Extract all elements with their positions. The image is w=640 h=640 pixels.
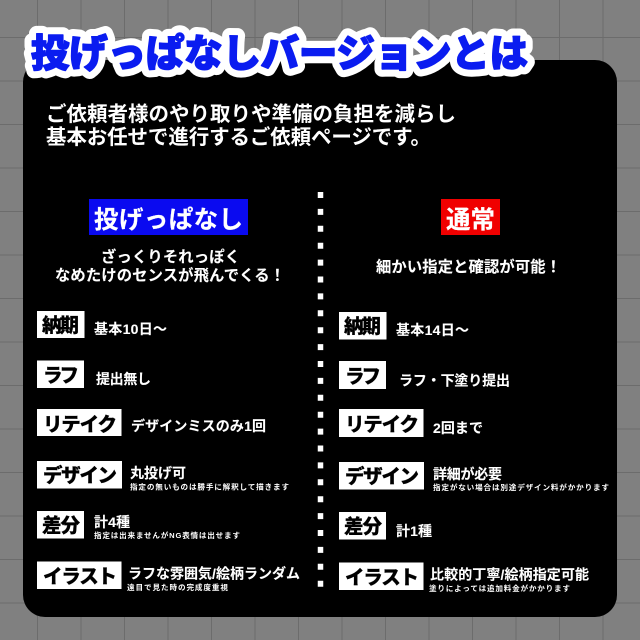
row: イラスト: イラスト xyxy=(345,567,419,589)
row: 差分: 差分 xyxy=(344,515,382,538)
row: イラスト: イラスト xyxy=(43,566,117,588)
row: ラフ: ラフ xyxy=(345,366,381,388)
row: 差分: 計1種 xyxy=(396,523,432,539)
heading: 通常: 通常 xyxy=(446,206,495,234)
row: ラフ xyxy=(37,360,151,388)
panel: left column, 投げっぱなし xyxy=(37,199,300,592)
intro text: 基本お任せで進行するご依頼ページです。 xyxy=(46,125,431,149)
row: 納期 xyxy=(37,311,167,338)
row: デザイン xyxy=(339,462,609,492)
heading: 通常 xyxy=(441,199,500,235)
row: デザイン: デザイン xyxy=(345,465,419,488)
row: イラスト xyxy=(37,562,300,592)
row: ラフ: ラフ・下塗り提出 xyxy=(399,372,510,388)
description: left column: なめたけのセンスが飛んでくる！ xyxy=(55,266,285,284)
row: イラスト: 遠目で見た時の完成度重視 xyxy=(127,582,228,592)
row: リテイク xyxy=(339,409,483,437)
panel: right column, 通常 xyxy=(339,199,609,593)
description: right column: 細かい指定と確認が可能！ xyxy=(376,258,561,276)
row: ラフ: 提出無し xyxy=(96,371,151,387)
row: 納期: 納期 xyxy=(344,315,381,338)
row: リテイク: リテイク xyxy=(43,414,117,436)
row: リテイク: リテイク xyxy=(345,414,419,436)
row: 納期: 基本14日〜 xyxy=(396,322,469,338)
row: デザイン: 詳細が必要 xyxy=(433,466,502,482)
intro text: ご依頼者様のやり取りや準備の負担を減らし xyxy=(46,102,456,126)
row: 納期: 基本10日〜 xyxy=(94,321,167,337)
row: 差分: 差分 xyxy=(42,514,80,537)
row: 差分: 計4種 xyxy=(94,514,130,530)
heading: 投げっぱなし: 投げっぱなし xyxy=(94,206,243,234)
row: イラスト: ラフな雰囲気/絵柄ランダム xyxy=(128,566,300,582)
row: 納期 xyxy=(339,312,469,340)
row: ラフ: ラフ xyxy=(43,365,79,387)
row: デザイン: 丸投げ可 xyxy=(130,465,186,481)
row: リテイク xyxy=(37,409,266,436)
row: 差分 xyxy=(37,511,240,540)
row: 納期: 納期 xyxy=(42,314,79,337)
row: デザイン: 指定がない場合は別途デザイン料がかかります xyxy=(433,482,609,492)
row: デザイン: 指定の無いものは勝手に解釈して描きます xyxy=(130,482,289,492)
title: 投げっぱなしバージョンとは xyxy=(31,33,528,76)
intro text xyxy=(46,102,456,149)
row: イラスト: 比較的丁寧/絵柄指定可能 xyxy=(430,566,589,582)
row: デザイン: デザイン xyxy=(43,464,117,487)
row: リテイク: 2回まで xyxy=(433,420,483,436)
row: デザイン xyxy=(37,461,289,492)
row: ラフ xyxy=(339,361,510,389)
row: イラスト xyxy=(339,562,589,593)
row: 差分: 指定は出来ませんがNG表情は出せます xyxy=(94,530,240,540)
description: left column xyxy=(55,248,285,284)
title: 投げっぱなしバージョンとは xyxy=(31,33,528,76)
row: イラスト: 塗りによっては追加料金がかかります xyxy=(429,583,570,593)
divider: dashed centre line xyxy=(318,192,323,590)
description: left column: ざっくりそれっぽく xyxy=(101,248,240,266)
row: リテイク: デザインミスのみ1回 xyxy=(131,418,266,434)
row: 差分 xyxy=(339,512,432,540)
